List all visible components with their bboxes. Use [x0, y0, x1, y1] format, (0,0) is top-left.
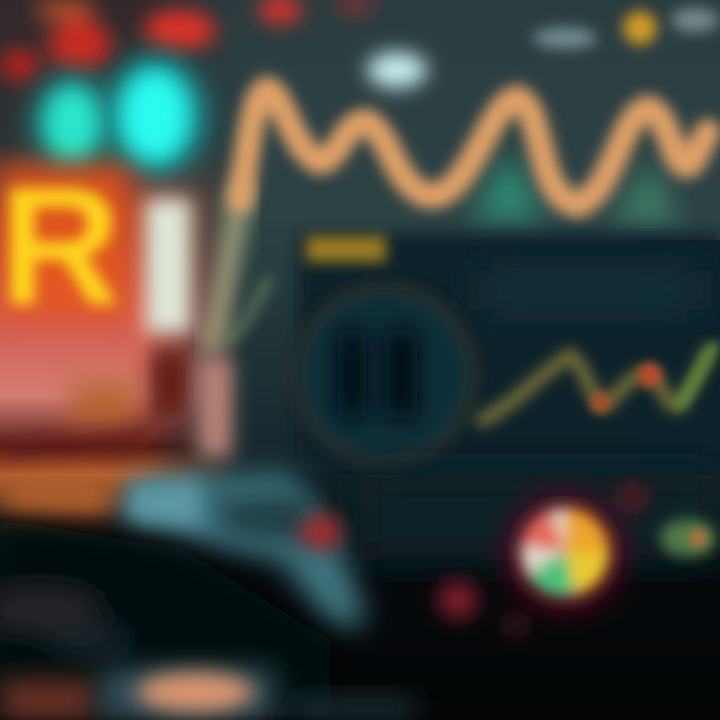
cyan hearts — [32, 55, 205, 175]
pale cloud and top right accents — [367, 8, 719, 88]
teal peaks beneath the wave — [470, 150, 680, 225]
panel tab — [306, 236, 386, 262]
red bokeh lights top left — [0, 0, 375, 81]
bottom salmon label — [0, 668, 415, 720]
teal device in lower area — [120, 472, 368, 625]
neon letter R: R — [0, 152, 121, 340]
lower left dark shapes — [0, 520, 330, 715]
small chip right — [660, 519, 716, 557]
lower panel band — [360, 475, 720, 560]
small red dots — [438, 484, 646, 637]
multicolour pie — [507, 495, 623, 611]
red lower left block — [0, 350, 232, 518]
circular dial icon — [292, 282, 478, 468]
pale letter I — [145, 198, 191, 333]
dark chart panel — [298, 234, 720, 470]
small line chart — [482, 346, 714, 420]
orange wave line — [212, 90, 708, 345]
